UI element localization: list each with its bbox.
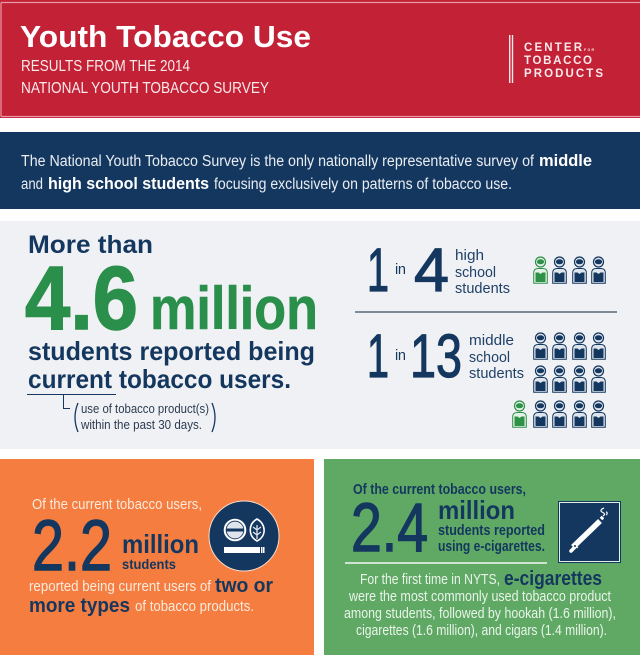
panel: survey description: The National Youth Tobacco Survey is the only nationally representative survey of (21, 153, 535, 170)
stat: 1 in 13 middle school students: in (395, 348, 406, 364)
panel: 2.2 million multiple products (0, 459, 314, 655)
logo: Center for Tobacco Products: FOR (584, 48, 594, 52)
callout: definition of current: within the past 30 days. (80, 418, 202, 432)
text: e-cigarettes most commonly used: For the first time in NYTS, (360, 571, 500, 588)
stat: 1 in 13 middle school students: 13 (410, 322, 462, 390)
stat: 1 in 4 high school students: in (395, 262, 406, 278)
panel: 2.4 million e-cigarettes: 2.4 (351, 489, 428, 566)
panel: survey description: focusing exclusively on patterns of tobacco use. (214, 176, 512, 193)
panel: 2.4 million e-cigarettes: using e-cigarettes. (438, 539, 545, 555)
logo: Center for Tobacco Products (509, 35, 603, 83)
heading: more than 4.6 million: students reported being (28, 336, 315, 366)
stat: 1 in 4 high school students (367, 236, 605, 304)
panel: survey description: high school students (48, 174, 209, 193)
panel: 2.2 million multiple products: two or (215, 575, 273, 597)
panel: 2.2 million multiple products: million (122, 529, 199, 559)
logo: Center for Tobacco Products: PRODUCTS (524, 68, 603, 80)
panel: survey description: and (21, 176, 43, 193)
heading: more than 4.6 million: 4.6 (25, 249, 138, 349)
stat: 1 in 13 middle school students: school (469, 349, 510, 366)
icons: 1 of 4 students (534, 257, 605, 283)
stat: 1 in 13 middle school students: middle (469, 332, 514, 349)
subtitle: RESULTS FROM THE 2014 (21, 58, 190, 75)
panel: 2.4 million e-cigarettes: students reported (438, 523, 545, 539)
heading: more than 4.6 million: million (150, 275, 318, 342)
callout: definition of current (27, 394, 215, 432)
icon: pill, leaf, cigarette (209, 501, 279, 571)
heading: more than 4.6 million: current tobacco users. (28, 364, 291, 394)
subtitle (21, 58, 269, 97)
panel: 2.4 million e-cigarettes: million (438, 495, 515, 525)
logo: Center for Tobacco Products: CENTER (524, 42, 583, 54)
panel: survey description (0, 132, 640, 209)
icon: e-cigarette (558, 501, 621, 563)
panel: 2.2 million multiple products: of tobacco products. (135, 598, 254, 615)
panel: 2.2 million multiple products: students (122, 557, 176, 572)
panel: 2.4 million e-cigarettes (324, 459, 640, 655)
callout: definition of current: use of tobacco product(s) (81, 402, 209, 416)
icons: 1 of 13 students (513, 333, 605, 427)
panel: 2.4 million e-cigarettes: Of the current tobacco users, (353, 481, 526, 498)
stat: 1 in 4 high school students: 1 (367, 236, 389, 304)
subtitle: NATIONAL YOUTH TOBACCO SURVEY (21, 80, 269, 97)
title: Youth Tobacco Use (20, 19, 311, 54)
text: e-cigarettes most commonly used: e-cigarettes (504, 568, 602, 590)
panel: 2.2 million multiple products: 2.2 (32, 507, 112, 586)
panel: header (0, 0, 640, 118)
stat: 1 in 4 high school students: 4 (414, 236, 449, 304)
panel: 2.2 million multiple products: more types (29, 595, 130, 617)
panel: survey description: middle (539, 151, 592, 170)
stat: 1 in 13 middle school students: students (469, 365, 524, 382)
stat: 1 in 13 middle school students: 1 (367, 322, 389, 390)
stat: 1 in 4 high school students: students (455, 280, 510, 297)
stat: 1 in 13 middle school students (367, 322, 605, 427)
stat: 1 in 4 high school students: high (455, 247, 484, 264)
logo: Center for Tobacco Products: TOBACCO (524, 55, 592, 67)
heading: more than 4.6 million: More than (28, 231, 153, 259)
text: e-cigarettes most commonly used (344, 568, 616, 639)
panel: 2.2 million multiple products: reported being current users of (29, 578, 212, 595)
panel: 2.2 million multiple products: Of the current tobacco users, (32, 496, 202, 513)
heading: more than 4.6 million (25, 231, 318, 394)
panel: main statistics (0, 221, 640, 449)
stat: 1 in 4 high school students: school (455, 264, 496, 281)
